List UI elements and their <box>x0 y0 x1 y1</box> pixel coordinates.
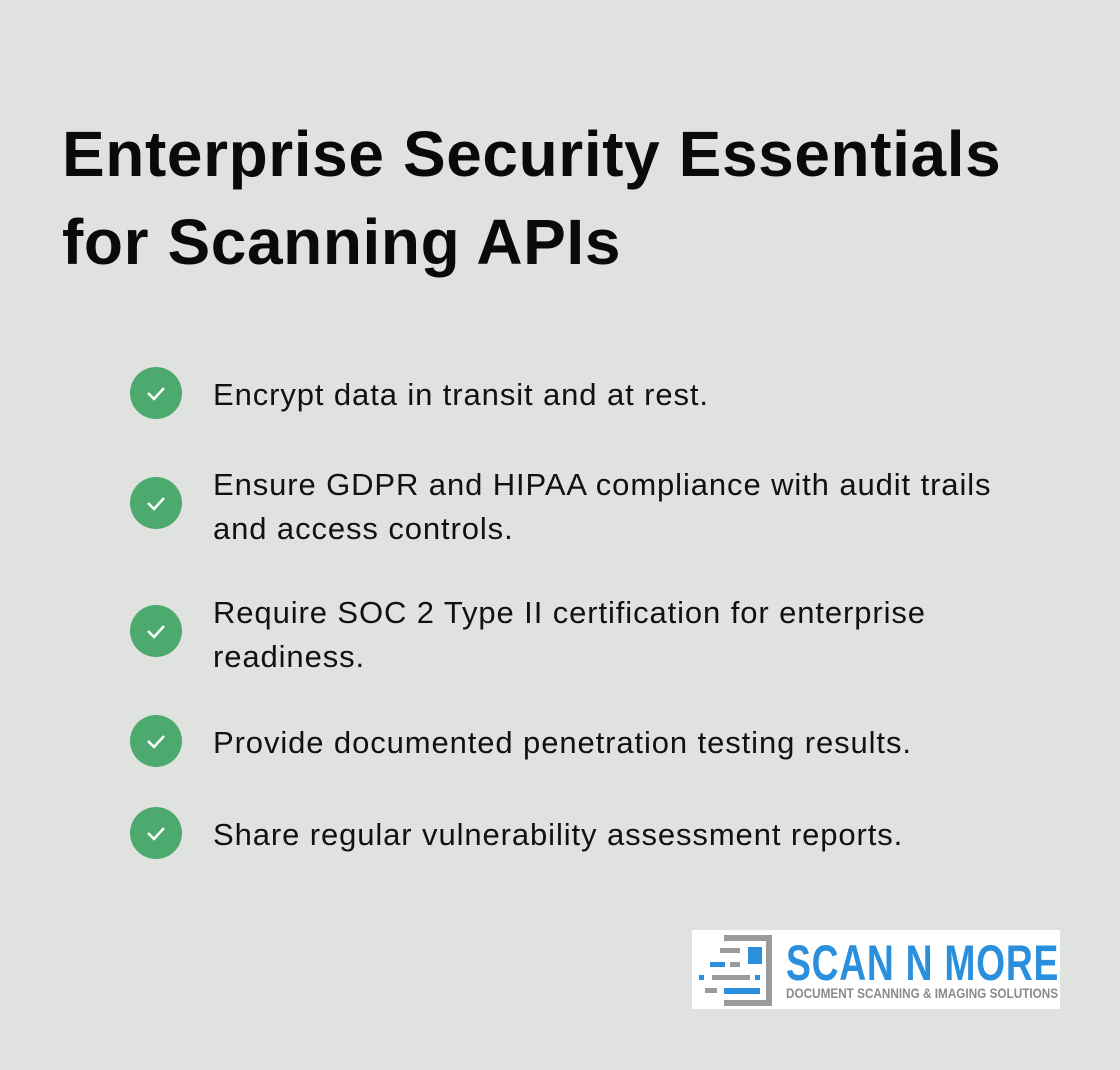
item 4: Provide documented penetration testing results. <box>213 725 912 760</box>
checklist <box>130 367 991 859</box>
item 5: Share regular vulnerability assessment reports. <box>213 817 903 852</box>
title: for Scanning APIs <box>62 206 621 278</box>
item 4 <box>130 715 912 767</box>
item 2: Ensure GDPR and HIPAA compliance with audit trails and access controls. <box>213 467 991 546</box>
logo tagline: DOCUMENT SCANNING & IMAGING SOLUTIONS <box>786 986 1058 1001</box>
logo <box>692 930 1060 1009</box>
title <box>62 118 1001 278</box>
logo wordmark: SCAN N MORE <box>786 935 1059 991</box>
item 5 <box>130 807 903 859</box>
logo icon <box>699 935 772 1006</box>
title: Enterprise Security Essentials <box>62 118 1001 190</box>
item 1 <box>130 367 709 419</box>
item 1: Encrypt data in transit and at rest. <box>213 377 709 412</box>
item 3: Require SOC 2 Type II certification for enterprise readiness. <box>213 595 926 674</box>
